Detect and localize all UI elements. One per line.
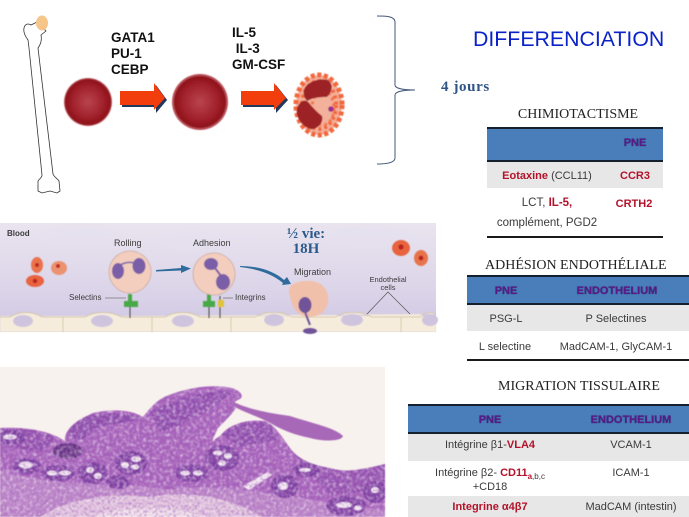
cell: PSG-L: PSG-L	[489, 313, 523, 325]
rolling leukocyte	[109, 251, 151, 318]
heading: adhésion endothéliale: ADHÉSION ENDOTHÉLIALE	[485, 258, 667, 273]
header cell: endothelium: ENDOTHELIUM	[577, 285, 657, 297]
text: cytokines: GM-CSF	[232, 57, 285, 72]
half-life label: 18H	[293, 241, 320, 257]
tissue	[0, 380, 387, 517]
label: Blood: Blood	[7, 229, 30, 238]
cell: LCT: complément, PGD2	[497, 217, 597, 229]
panel: histology photograph	[0, 367, 387, 517]
header cell: PNE: PNE	[479, 414, 501, 426]
label: Rolling: Rolling	[114, 238, 142, 248]
text: cytokines: IL-5	[232, 25, 256, 40]
label: Migration: Migration	[294, 267, 331, 277]
table: chimiotactisme	[487, 127, 663, 238]
migrating leukocyte	[289, 281, 328, 334]
cell: MadCAM intestin: MadCAM (intestin)	[585, 501, 677, 513]
text: transcription factors: GATA1	[111, 30, 155, 45]
heading: migration tissulaire: MIGRATION TISSULAIRE	[498, 379, 660, 394]
label: Integrins: Integrins	[235, 293, 266, 302]
icon: femur bone	[24, 16, 60, 193]
arrow: rolling to adhesion	[156, 265, 191, 273]
cell: P selectines: P Selectines	[586, 313, 646, 325]
red blood cells	[26, 240, 428, 287]
header cell: PNE	[624, 137, 646, 149]
text: transcription factors: CEBP	[111, 62, 149, 77]
text: transcription factors: PU-1	[111, 46, 142, 61]
cell: VCAM-1: VCAM-1	[610, 439, 652, 451]
selectin pointer	[105, 297, 126, 299]
endothelium layer	[0, 312, 438, 332]
half-life label: ½ vie:	[287, 226, 325, 242]
cell: VLA4: Intégrine β1-VLA4	[445, 439, 535, 451]
integrin pointer	[223, 297, 233, 299]
cell: CD11	[435, 467, 545, 493]
cell: ICAM-1: ICAM-1	[612, 467, 650, 479]
label: Endothelial cells: cells	[380, 283, 396, 292]
text: cytokines: IL-3	[236, 41, 260, 56]
cell: CD11: Intégrine β2- CD11a,b,c	[435, 467, 545, 481]
heading: chimiotactisme: CHIMIOTACTISME	[518, 107, 638, 122]
cell: CD11: +CD18	[473, 481, 507, 493]
text: cytokines	[232, 25, 285, 72]
cell: CCR3: CCR3	[620, 170, 650, 182]
label: Adhesion: Adhesion	[193, 238, 231, 248]
bracket	[377, 16, 415, 164]
cell: integrine a4b7: Integrine α4β7	[452, 501, 528, 513]
icon: second progenitor cell	[172, 74, 228, 130]
panel: blood vessel leukocyte adhesion	[0, 223, 438, 334]
arrow: adhesion to migration	[240, 266, 291, 285]
cell: eotaxine: Eotaxine (CCL11)	[502, 170, 592, 182]
icon: first progenitor cell	[64, 78, 112, 126]
icon: mature eosinophil	[296, 75, 342, 135]
cell: LCT	[497, 197, 597, 229]
endothelial cells pointer lines	[367, 292, 410, 314]
cell: MadCAM-1: MadCAM-1, GlyCAM-1	[560, 341, 672, 353]
cell: L selectine: L selectine	[479, 341, 531, 353]
glands	[0, 430, 387, 516]
duration label: 4 jours	[441, 79, 490, 95]
table: adhésion	[467, 275, 689, 361]
text: transcription factors	[111, 30, 155, 77]
header cell: PNE: PNE	[495, 285, 517, 297]
table: migration	[408, 404, 689, 517]
title: DIFFERENCIATION	[473, 27, 664, 51]
adhering leukocyte	[193, 253, 235, 318]
arrow: second differentiation arrow	[241, 83, 288, 113]
cell: LCT: LCT, IL-5,	[522, 197, 572, 209]
label: Selectins: Selectins	[69, 293, 101, 302]
cell: CRTH2: CRTH2	[616, 198, 652, 210]
header cell: endothelium: ENDOTHELIUM	[591, 414, 671, 426]
arrow: first differentiation arrow	[120, 83, 167, 113]
label: Endothelial cells: Endothelial	[369, 275, 407, 284]
